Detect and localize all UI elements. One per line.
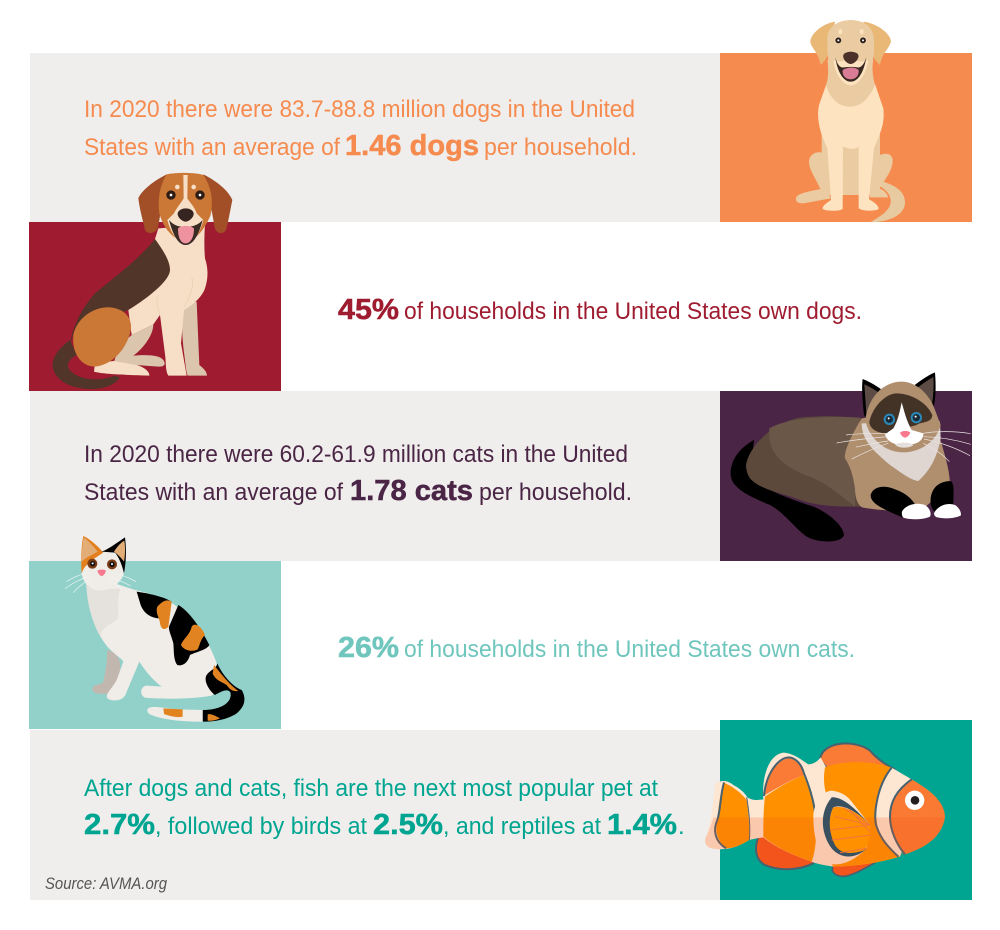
text: source: Source: AVMA.org [45, 874, 167, 893]
text: dog population statistic: 1.46 dogs [345, 130, 479, 162]
panel: purple cat tile [720, 391, 972, 561]
text: cat population statistic: per household. [479, 479, 632, 506]
icon: beagle [53, 173, 232, 389]
text: cat household share: 26% [338, 632, 399, 664]
panel: dog household tile [29, 222, 281, 391]
panel: fish tile [720, 720, 972, 900]
text: other pets statistic: , followed by birds at [155, 813, 367, 840]
panel: fish background [30, 730, 720, 900]
text: dog population statistic: per household. [484, 134, 637, 161]
text: other pets statistic [84, 775, 685, 841]
icon: ragdoll cat [731, 372, 971, 541]
text: other pets statistic: . [678, 813, 685, 840]
text: other pets statistic: 2.7% [84, 809, 155, 841]
panel: dogs count background [30, 53, 720, 222]
icon: yellow labrador [796, 20, 905, 222]
text: other pets statistic: After dogs and cats, fish are the next most popular pet at [84, 775, 658, 802]
panel: cat household tile [29, 561, 281, 729]
text: other pets statistic: 2.5% [373, 809, 443, 841]
text: dog household share: 45% [338, 294, 399, 326]
text: dog population statistic [84, 96, 637, 162]
text: dog population statistic: In 2020 there were 83.7-88.8 million dogs in the United [84, 96, 635, 123]
text: dog household share: of households in the United States own dogs. [404, 298, 862, 325]
text: other pets statistic: 1.4% [607, 809, 677, 841]
text: cat population statistic: 1.78 cats [350, 475, 473, 507]
text: other pets statistic: , and reptiles at [443, 813, 601, 840]
icon: clownfish [705, 743, 945, 876]
icon: calico cat [65, 535, 244, 722]
text: cat population statistic: States with an average of [84, 479, 343, 506]
text: cat population statistic [84, 441, 632, 507]
panel: orange dog tile [720, 53, 972, 222]
panel: cats count background [30, 391, 720, 561]
text: cat household share: of households in the United States own cats. [404, 636, 855, 663]
text: cat population statistic: In 2020 there were 60.2-61.9 million cats in the United [84, 441, 628, 468]
text: dog population statistic: States with an average of [84, 134, 340, 161]
